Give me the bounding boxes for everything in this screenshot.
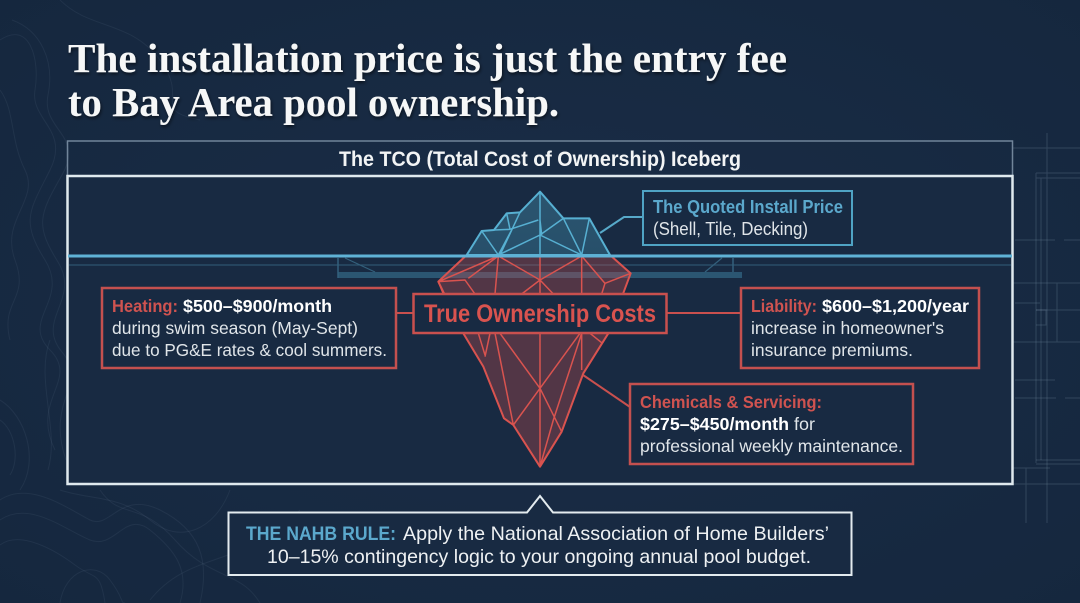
callout: liability — [741, 288, 979, 368]
callout: heating: due to PG&E rates & cool summers. — [112, 340, 387, 360]
callout: chemicals and servicing: Chemicals & Servicing: — [640, 392, 822, 412]
callout: chemicals and servicing: $275–$450/month — [640, 414, 789, 434]
callout: NAHB rule: THE NAHB RULE: — [246, 523, 396, 545]
callout: chemicals and servicing: for — [794, 414, 815, 434]
callout: NAHB rule — [228, 496, 852, 575]
callout: chemicals and servicing: professional weekly maintenance. — [640, 436, 903, 456]
chart heading: The TCO (Total Cost of Ownership) Iceberg — [339, 147, 741, 171]
callout: quoted install price: The Quoted Install Price — [653, 196, 843, 217]
iceberg visible tip — [467, 192, 610, 255]
title: to Bay Area pool ownership. — [68, 79, 559, 125]
title: The installation price is just the entry fee — [68, 35, 787, 81]
callout: NAHB rule: Apply the National Association of Home Builders’ — [403, 523, 829, 545]
callout: liability: insurance premiums. — [751, 340, 913, 360]
callout: NAHB rule: 10–15% contingency logic to your ongoing annual pool budget. — [267, 546, 811, 568]
callout: liability: Liability: — [751, 296, 817, 316]
iceberg underwater portion — [438, 255, 631, 467]
pool outline under the waterline — [69, 258, 1011, 278]
icon: iceberg — [438, 192, 631, 467]
callout: quoted install price — [600, 191, 852, 245]
callout: quoted install price: (Shell, Tile, Decking) — [653, 219, 808, 239]
callout: heating: Heating: — [112, 296, 178, 316]
callout: heating: $500–$900/month — [183, 296, 332, 316]
callout: heating — [102, 288, 414, 368]
label: true ownership costs: True Ownership Costs — [424, 300, 656, 328]
callout: liability: increase in homeowner's — [751, 318, 944, 338]
waterline — [68, 254, 1012, 258]
panel: iceberg diagram frame — [68, 176, 1012, 484]
callout: chemicals and servicing — [583, 375, 913, 464]
callout: heating: during swim season (May-Sept) — [112, 318, 358, 338]
title — [68, 35, 787, 125]
callout: liability: $600–$1,200/year — [822, 296, 969, 316]
panel: iceberg heading frame — [68, 141, 1012, 177]
label: true ownership costs — [414, 294, 741, 333]
